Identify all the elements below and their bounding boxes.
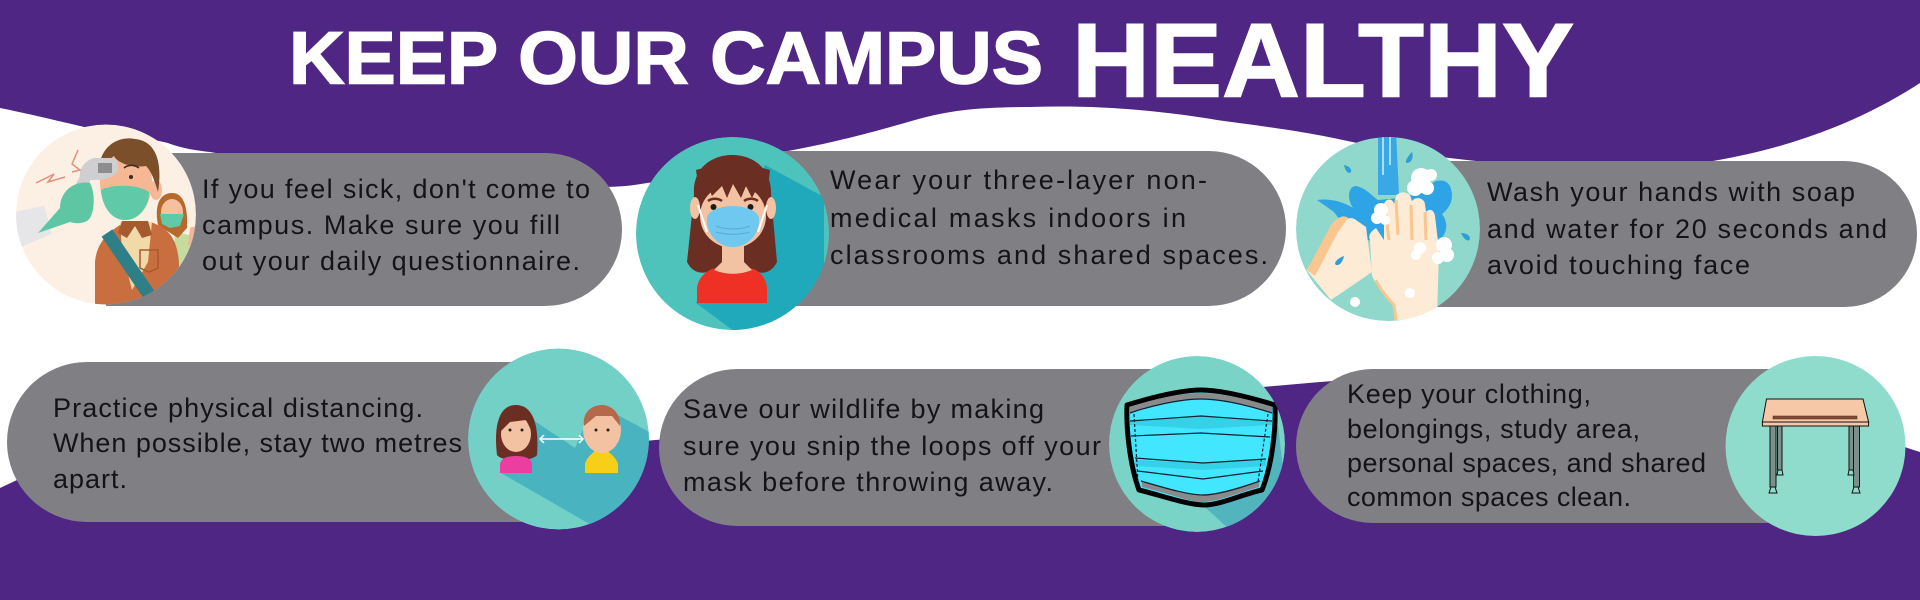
title	[289, 2, 1574, 120]
icon: temperature check	[14, 124, 199, 306]
panel: stay home if sick	[14, 124, 622, 306]
pill background	[106, 153, 622, 306]
description text	[202, 174, 590, 276]
description text	[830, 165, 1268, 270]
description text: Keep your clothing,	[1347, 379, 1591, 409]
icon: desk	[1726, 356, 1906, 536]
pill background	[7, 362, 558, 522]
icon: woman wearing mask	[636, 137, 829, 340]
description text: campus. Make sure you fill	[202, 210, 560, 240]
description text: medical masks indoors in	[830, 203, 1186, 233]
description text: If you feel sick, don't come to	[202, 174, 590, 204]
icon: hand washing	[1296, 130, 1480, 321]
description text	[1487, 177, 1887, 280]
pill background	[1296, 369, 1815, 523]
description text: When possible, stay two metres	[53, 428, 462, 458]
purple top wave background	[0, 0, 1920, 187]
description text: Practice physical distancing.	[53, 393, 423, 423]
pill background	[659, 369, 1197, 526]
description text	[683, 394, 1101, 497]
description text: belongings, study area,	[1347, 414, 1640, 444]
panel: keep spaces clean	[1296, 356, 1906, 536]
panel: wash hands	[1296, 130, 1917, 321]
description text: avoid touching face	[1487, 250, 1750, 280]
description text: out your daily questionnaire.	[202, 246, 580, 276]
description text	[1347, 379, 1706, 512]
panel: snip mask loops	[659, 356, 1290, 532]
description text: and water for 20 seconds and	[1487, 214, 1887, 244]
icon: two people apart	[468, 348, 655, 530]
description text: apart.	[53, 464, 127, 494]
icon: disposable mask	[1109, 356, 1290, 532]
title word: healthy: HEALTHY	[1072, 2, 1574, 120]
description text: personal spaces, and shared	[1347, 448, 1706, 478]
panel: physical distancing	[7, 348, 655, 530]
description text: common spaces clean.	[1347, 482, 1631, 512]
purple bottom wave background	[0, 377, 1920, 600]
pill background	[1388, 161, 1917, 307]
description text: Wear your three-layer non-	[830, 165, 1207, 195]
pill background	[732, 151, 1286, 306]
description text: Wash your hands with soap	[1487, 177, 1855, 207]
description text: sure you snip the loops off your	[683, 431, 1101, 461]
description text	[53, 393, 462, 494]
description text: classrooms and shared spaces.	[830, 240, 1268, 270]
panel: wear a mask	[636, 137, 1286, 340]
title line: keep our campus: KEEP OUR CAMPUS	[289, 16, 1043, 100]
description text: Save our wildlife by making	[683, 394, 1044, 424]
description text: mask before throwing away.	[683, 467, 1053, 497]
